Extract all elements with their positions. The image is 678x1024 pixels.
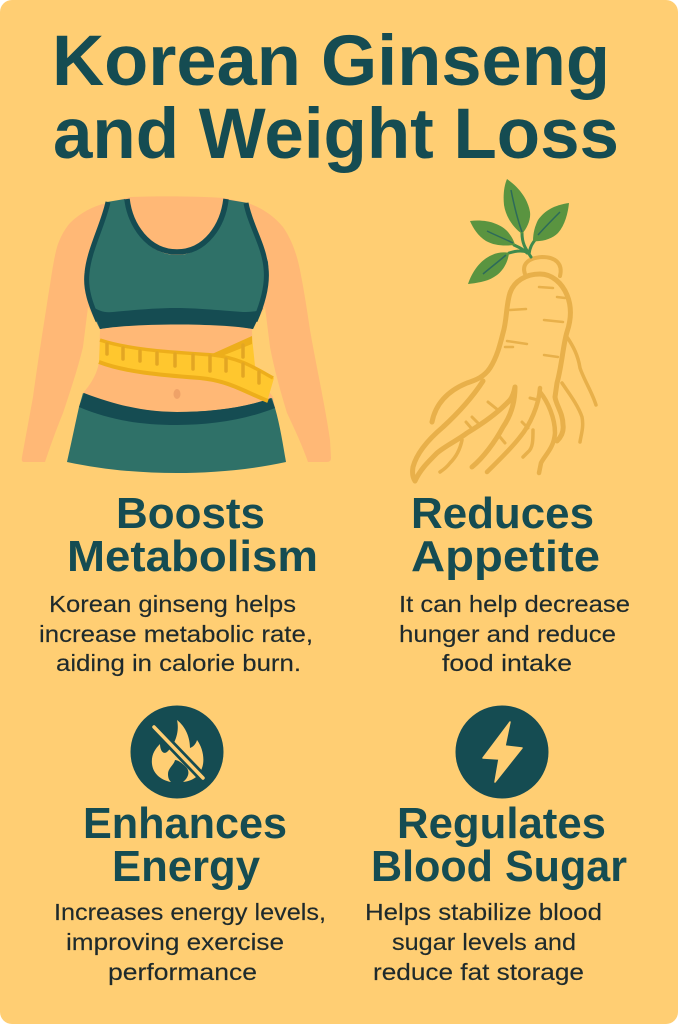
- body text: aiding in calorie burn.: [56, 650, 301, 676]
- body text: Helps stabilize blood: [365, 899, 602, 925]
- heading: Metabolism: [67, 532, 318, 581]
- body text: [365, 899, 602, 985]
- body text: [54, 899, 326, 985]
- heading: Blood Sugar: [371, 842, 627, 891]
- section: reduces appetite: [399, 489, 630, 676]
- body text: It can help decrease: [399, 591, 630, 617]
- heading: Boosts: [116, 489, 265, 538]
- body text: Increases energy levels,: [54, 899, 326, 925]
- body text: food intake: [442, 650, 572, 676]
- sports bra: [85, 199, 268, 329]
- body text: [399, 591, 630, 676]
- heading: [371, 799, 627, 891]
- illustration: ginseng root: [413, 179, 596, 481]
- body text: hunger and reduce: [399, 621, 616, 647]
- root: [413, 257, 596, 481]
- heading: Regulates: [397, 799, 606, 848]
- heading: Energy: [112, 842, 261, 891]
- body text: Korean ginseng helps: [49, 591, 296, 617]
- navel: [174, 389, 180, 399]
- heading: [411, 489, 600, 581]
- title: and Weight Loss: [53, 95, 619, 174]
- heading: Reduces: [411, 489, 594, 538]
- heading: Enhances: [83, 799, 287, 848]
- body text: improving exercise: [66, 929, 284, 955]
- icon: crossed-out flame: [130, 706, 224, 798]
- shorts: [67, 393, 286, 473]
- heading: [83, 799, 287, 891]
- section: boosts metabolism: [39, 489, 318, 676]
- section: enhances energy: [54, 799, 326, 985]
- section: regulates blood sugar: [365, 799, 627, 985]
- body text: reduce fat storage: [373, 959, 584, 985]
- body text: performance: [108, 959, 257, 985]
- leaves: [468, 179, 569, 284]
- icon: lightning bolt: [456, 706, 548, 798]
- body text: sugar levels and: [392, 929, 576, 955]
- body text: increase metabolic rate,: [39, 621, 313, 647]
- body text: [39, 591, 313, 676]
- title: [52, 22, 619, 174]
- illustration: torso with measuring tape: [22, 196, 331, 473]
- heading: [67, 489, 318, 581]
- heading: Appetite: [411, 532, 600, 581]
- title: Korean Ginseng: [52, 22, 610, 101]
- measuring tape: [99, 336, 274, 402]
- skin: arms and torso: [22, 196, 331, 462]
